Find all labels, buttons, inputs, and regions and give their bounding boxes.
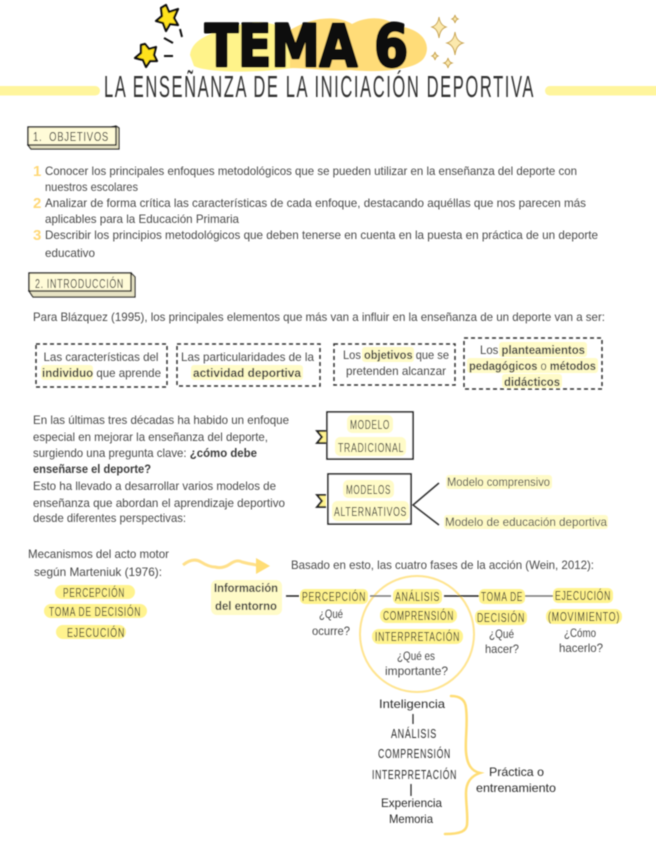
phase: ejecucion: (MOVIMIENTO): [548, 609, 620, 624]
phase: percepcion: PERCEPCIÓN: [302, 589, 366, 604]
objective 3: Describir los principios metodológicos que deben tenerse en cuenta en la puesta en práctica de un deporte: [45, 228, 598, 242]
phase: toma de decision: [475, 589, 527, 656]
objective 2: 2: [33, 195, 41, 212]
phase: toma de decision: DECISIÓN: [477, 610, 525, 625]
dashed box: objetivos: Los objetivos que se: [343, 348, 449, 362]
phase: analisis: INTERPRETACIÓN: [375, 629, 460, 644]
objectives list: [33, 163, 598, 260]
phase: analisis: COMPRENSIÓN: [383, 608, 454, 623]
phase: analisis: importante?: [385, 664, 448, 678]
hierarchy column: Inteligencia: [379, 697, 445, 711]
objective 3: educativo: [45, 246, 95, 260]
objective 2: [33, 195, 586, 226]
dashed box: individuo: [36, 344, 167, 387]
icon: star bottom: [135, 44, 157, 67]
phase: toma de decision: hacer?: [485, 642, 519, 656]
right bar: [545, 86, 656, 96]
wavy arrow: [183, 558, 270, 574]
dashed box: individuo: Las características del: [44, 350, 158, 364]
model box: alternativos: MODELOS: [346, 482, 391, 497]
paragraph: modelos: especial en mejorar la enseñanza del deporte,: [33, 430, 268, 444]
model box: alternativos: ALTERNATIVOS: [334, 504, 407, 519]
paragraph: modelos: enseñanza que abordan el aprendizaje deportivo: [33, 496, 285, 510]
model box: tradicional: [317, 412, 413, 459]
phase: ejecucion: ¿Cómo: [564, 626, 596, 640]
dashed box: actividad: [177, 344, 320, 386]
phase: analisis: ¿Qué es: [397, 649, 435, 663]
section heading: introduccion: 2. INTRODUCCIÓN: [35, 276, 124, 291]
objective 2: Analizar de forma crítica las características de cada enfoque, destacando aquéllas que nos parecen más: [45, 196, 586, 210]
dashed box: actividad: Las particularidades de la: [181, 350, 314, 364]
objective 2: aplicables para la Educación Primaria: [45, 212, 239, 226]
intro sentence: Para Blázquez (1995), los principales elementos que más van a influir en la enseñanza de un deporte van a ser:: [33, 310, 605, 324]
model box: tradicional: MODELO: [350, 417, 390, 432]
icon: sigma marker: [317, 431, 326, 443]
action phase connectors: [286, 595, 554, 597]
section heading: objetivos: [28, 126, 119, 149]
objective 1: nuestros escolares: [45, 180, 138, 194]
curly brace: [445, 696, 480, 834]
section heading: introduccion: [29, 273, 135, 297]
text: basado en esto: Basado en esto, las cuatro fases de la acción (Wein, 2012):: [291, 558, 594, 572]
phase: toma de decision: ¿Qué: [489, 627, 514, 641]
phase: ejecucion: hacerlo?: [559, 641, 603, 655]
mecanismos del acto motor: Mecanismos del acto motor: [28, 547, 169, 561]
label: modelo de educacion deportiva: Modelo de educación deportiva: [445, 515, 607, 529]
paragraph: modelos: surgiendo una pregunta clave: ¿cómo debe: [33, 446, 257, 460]
icon: motion dashes: [164, 29, 182, 56]
phase: analisis: [372, 589, 463, 678]
title blobs: [190, 18, 427, 72]
ellipse: analisis: [360, 576, 474, 692]
phase: toma de decision: TOMA DE: [481, 589, 523, 604]
objective 1: Conocer los principales enfoques metodológicos que se pueden utilizar en la enseñanza del deporte con: [45, 164, 577, 178]
dashed box: actividad: actividad deportiva: [193, 366, 301, 380]
header banner: [0, 5, 656, 104]
practica o entrenamiento: [476, 765, 556, 795]
dashed box: planteamientos: didácticos: [504, 375, 560, 389]
dashed box: planteamientos: Los planteamientos: [480, 343, 585, 357]
phase: analisis: ANÁLISIS: [395, 589, 440, 604]
mecanismos del acto motor: [28, 547, 169, 640]
hierarchy column: Memoria: [389, 812, 433, 826]
practica o entrenamiento: entrenamiento: [476, 781, 556, 795]
objective 1: [33, 163, 577, 194]
paragraph: modelos: enseñarse el deporte?: [33, 462, 151, 476]
phase: ejecucion: EJECUCIÓN: [555, 588, 611, 603]
hierarchy column: ANÁLISIS: [391, 726, 437, 741]
mecanismos del acto motor: PERCEPCIÓN: [63, 585, 125, 600]
informacion del entorno: [211, 580, 282, 615]
phase: percepcion: ¿Qué: [319, 607, 343, 621]
hierarchy column: [372, 697, 457, 826]
mecanismos del acto motor: TOMA DE DECISIÓN: [49, 604, 141, 619]
informacion del entorno: del entorno: [215, 599, 277, 613]
practica o entrenamiento: Práctica o: [489, 765, 544, 779]
phase: percepcion: ocurre?: [312, 624, 350, 638]
hierarchy column: COMPRENSIÓN: [378, 746, 451, 761]
paragraph: modelos: desde diferentes perspectivas:: [33, 511, 186, 525]
dashed box: individuo: individuo que aprende: [42, 366, 161, 380]
dashed box: objetivos: pretenden alcanzar: [346, 364, 446, 378]
left bar: [0, 86, 100, 96]
icon: sigma marker: [317, 495, 326, 507]
icon: star top: [156, 5, 178, 31]
icon: sparkles: [432, 15, 463, 68]
informacion del entorno: Información: [214, 581, 278, 595]
mecanismos del acto motor: EJECUCIÓN: [67, 625, 125, 640]
paragraph: modelos: [33, 413, 289, 525]
label: modelo comprensivo: Modelo comprensivo: [447, 475, 550, 489]
hierarchy column: Experiencia: [381, 796, 442, 810]
objective 3: 3: [33, 227, 41, 244]
dashed box: objetivos: [334, 344, 455, 385]
paragraph: modelos: Esto ha llevado a desarrollar varios modelos de: [33, 479, 276, 493]
paragraph: modelos: En las últimas tres décadas ha habido un enfoque: [33, 413, 289, 427]
dashed box: planteamientos: [464, 338, 602, 389]
title: TEMA 6: [205, 12, 408, 80]
branch lines: [413, 483, 439, 525]
model box: alternativos: [317, 474, 411, 524]
hierarchy column: INTERPRETACIÓN: [372, 767, 457, 782]
objective 1: 1: [33, 163, 41, 180]
phase: percepcion: [300, 589, 368, 638]
section heading: objetivos: 1. OBJETIVOS: [33, 129, 109, 144]
mecanismos del acto motor: según Marteniuk (1976):: [34, 565, 162, 579]
phase: ejecucion: [546, 588, 622, 655]
objective 3: [33, 227, 598, 260]
dashed box: planteamientos: pedagógicos o métodos: [469, 359, 596, 373]
model box: tradicional: TRADICIONAL: [338, 440, 404, 455]
